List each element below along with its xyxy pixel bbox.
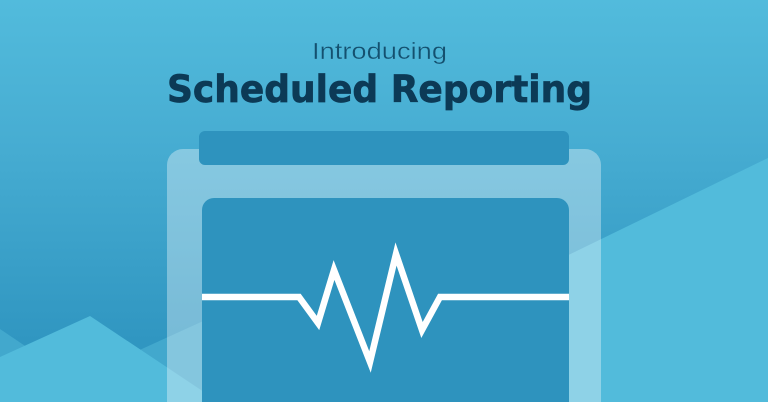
title: Introducing: Introducing (312, 38, 447, 64)
panel header bar (199, 131, 569, 165)
report panel (167, 131, 601, 402)
title: Scheduled Reporting: Scheduled Reporting (167, 68, 592, 111)
pulse line (202, 254, 569, 362)
report screen (202, 198, 569, 402)
mountains: front layer (0, 158, 768, 402)
mountains: back layer (0, 262, 400, 402)
panel body (167, 149, 601, 402)
